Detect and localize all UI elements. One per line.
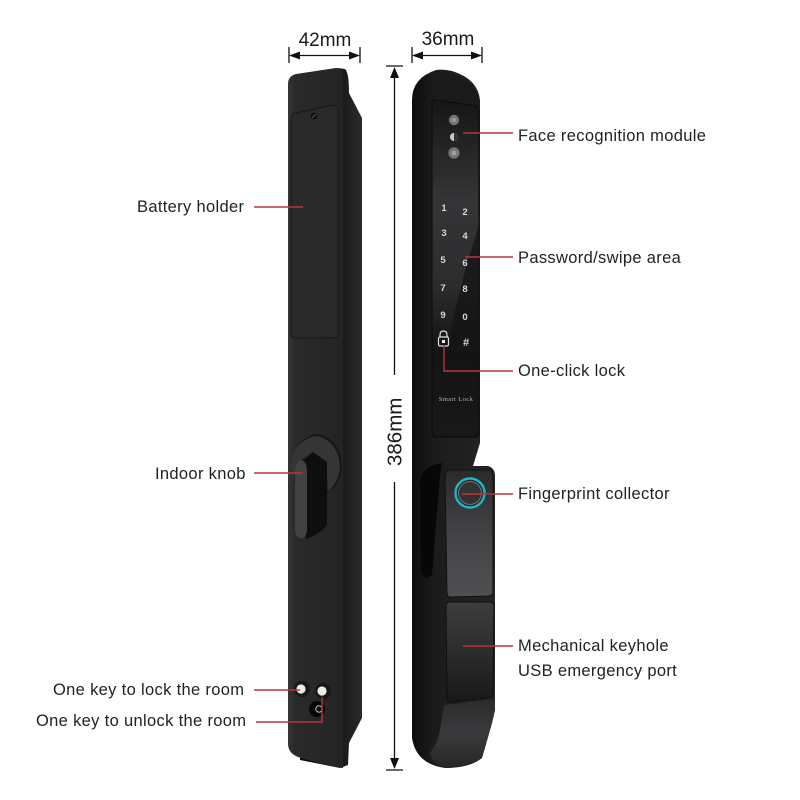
keypad digits: 3: [441, 228, 447, 239]
front body: [412, 70, 495, 768]
keypad digits: 4: [462, 231, 468, 242]
indoor knob: [291, 434, 342, 539]
screen glare shadow: [448, 225, 479, 345]
label: one key to unlock the room: [36, 697, 322, 730]
front top cap: [428, 72, 480, 108]
label: face recognition module: Face recognition module: [518, 127, 706, 145]
keypad digits: 0: [462, 312, 468, 323]
lock foot: [430, 699, 495, 768]
label: one-click lock: [444, 345, 626, 380]
label: one key to unlock the room: One key to unlock the room: [36, 712, 246, 730]
label: mechanical keyhole and USB port: [463, 637, 677, 680]
face camera module: [448, 115, 460, 159]
keypad digits: 9: [440, 310, 446, 321]
dimension: height 386mm: [384, 66, 406, 770]
label: one key to lock the room: One key to lock the room: [53, 681, 244, 699]
keypad digits: #: [463, 337, 469, 349]
cover screw: [310, 112, 318, 120]
lock back view: [288, 68, 362, 768]
back body face: [288, 68, 343, 768]
label: password and swipe area: Password/swipe area: [518, 249, 682, 267]
keypad digits: 8: [462, 284, 468, 295]
keypad digits: 7: [440, 283, 446, 294]
keypad digits: 2: [462, 207, 468, 218]
lock front view: [412, 70, 495, 768]
screen brand text: Smart Lock: [439, 396, 474, 403]
keypad screen: [432, 100, 479, 437]
back body side: [300, 68, 362, 768]
label: battery holder: Battery holder: [137, 198, 245, 216]
room key buttons: [294, 681, 331, 717]
keypad digits: 6: [462, 258, 468, 269]
keypad digits: [440, 203, 469, 349]
dimension: height 386mm: 386mm: [384, 398, 406, 466]
keyhole cover panel: [446, 602, 494, 702]
keypad digits: 1: [441, 203, 447, 214]
dimension: width 42mm: [289, 30, 360, 63]
label: fingerprint collector: Fingerprint collector: [518, 485, 670, 503]
fingerprint block: [445, 470, 493, 597]
padlock key icon: [438, 331, 448, 346]
dimension: width 36mm: [412, 29, 482, 63]
label: mechanical keyhole and USB port: Mechanical keyhole: [518, 637, 669, 655]
keypad digits: 5: [440, 255, 446, 266]
label: one-click lock: One-click lock: [518, 362, 626, 380]
label: indoor knob: Indoor knob: [155, 465, 246, 483]
dimension: width 42mm: 42mm: [299, 30, 351, 51]
label: mechanical keyhole and USB port: USB emergency port: [518, 662, 677, 680]
side slot: [420, 463, 442, 578]
fingerprint reader ring: [456, 478, 484, 508]
battery holder cover: [291, 105, 338, 338]
dimension: width 36mm: 36mm: [422, 29, 474, 50]
